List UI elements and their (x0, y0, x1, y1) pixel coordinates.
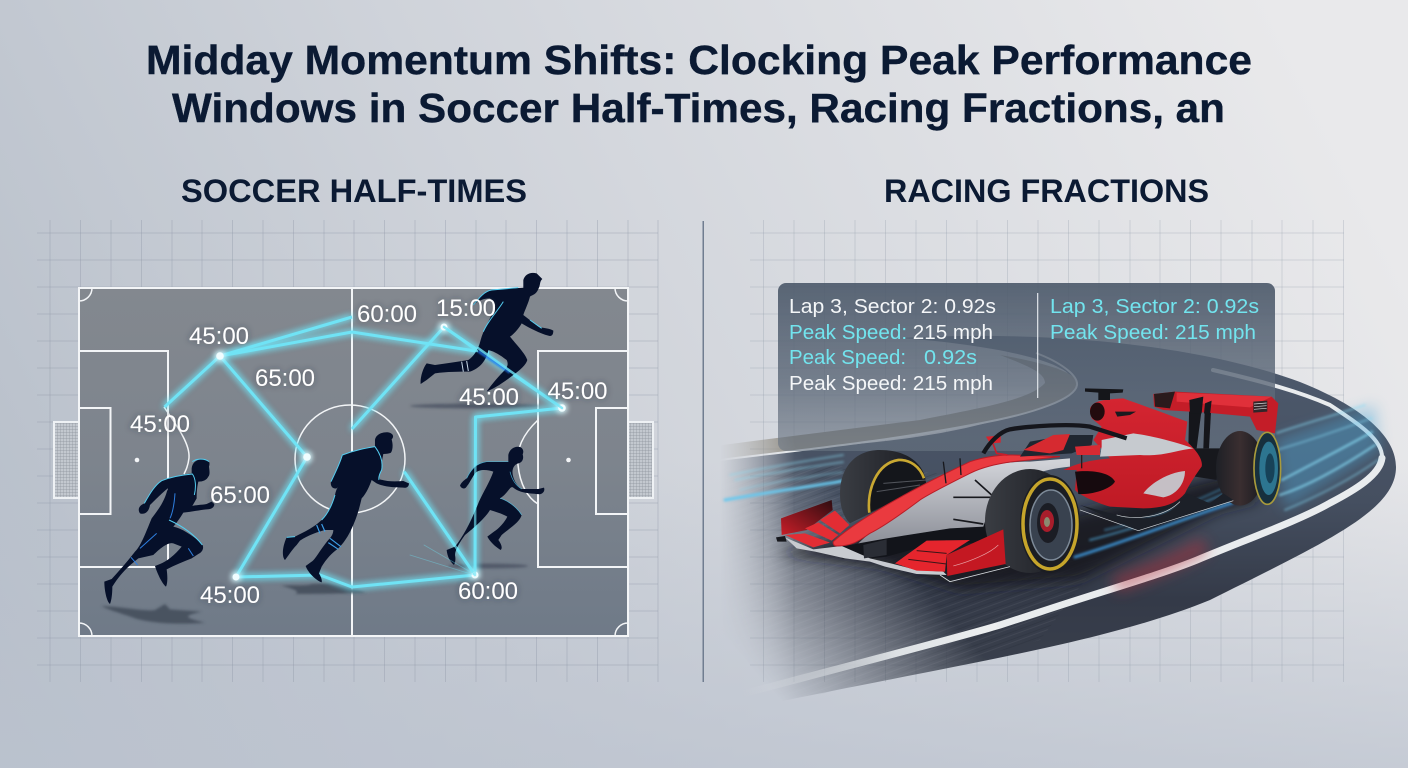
rear section: wing, wheel, floor, engine cover (1063, 388, 1281, 531)
time labels (130, 295, 608, 609)
chassis (842, 507, 1003, 559)
road surface (715, 336, 1396, 712)
time labels: 60:00 (357, 301, 417, 328)
red track glow (1115, 545, 1205, 585)
car shadow (778, 470, 1260, 590)
engine cover (1063, 388, 1202, 508)
cockpit and halo (983, 425, 1127, 468)
panel: racing track (715, 283, 1396, 712)
player: left runner (104, 459, 214, 604)
left readouts: Peak Speed: (789, 347, 906, 369)
right readouts (1050, 296, 1259, 344)
goal nets (54, 422, 653, 498)
left readouts: Peak Speed: 215 mph (789, 322, 993, 344)
race car (776, 388, 1281, 582)
info panel (778, 283, 1275, 451)
tracking lines (164, 317, 562, 587)
player shadows (102, 404, 540, 624)
time labels: 45:00 (547, 378, 608, 405)
title: Midday Momentum Shifts: Clocking Peak Performance (146, 37, 1252, 83)
time labels: 65:00 (210, 482, 270, 509)
time labels: 65:00 (255, 365, 315, 392)
pitch surface and markings (79, 288, 628, 636)
tracking nodes (216, 324, 566, 580)
right readouts: Lap 3, Sector 2: 0.92s (1050, 296, 1259, 318)
left readouts (789, 296, 996, 395)
tracking lines over players (404, 327, 562, 575)
right front wing (895, 529, 1010, 582)
nose red (833, 455, 1060, 546)
player: top runner (421, 273, 553, 392)
heading: soccer half-times: SOCCER HALF-TIMES (181, 173, 527, 209)
time labels: 45:00 (200, 582, 260, 609)
player silhouettes (104, 273, 553, 604)
right readouts: Peak Speed: 215 mph (1050, 322, 1256, 344)
floor (1080, 493, 1233, 531)
white track stripe (735, 370, 1382, 696)
time labels: 45:00 (459, 384, 519, 411)
time labels: 15:00 (436, 295, 496, 322)
left readouts: Peak Speed: 215 mph (789, 373, 993, 395)
panel: soccer pitch (54, 273, 653, 636)
rear wing (1153, 392, 1278, 480)
time labels: 60:00 (458, 578, 518, 605)
left mirror (986, 436, 1001, 443)
far front wheel (840, 450, 927, 523)
player: centre runner (283, 432, 409, 582)
left readouts: 0.92s (924, 347, 977, 369)
near front wheel (985, 469, 1080, 573)
title: Windows in Soccer Half-Times, Racing Fractions, an (172, 85, 1225, 131)
nose details (943, 458, 992, 524)
player: right runner (447, 447, 544, 565)
time labels: 45:00 (130, 411, 190, 438)
front section: far wheel, left wing, nose (776, 436, 1070, 575)
time labels: 45:00 (189, 323, 249, 350)
divider (702, 221, 704, 682)
heading: racing fractions: RACING FRACTIONS (884, 173, 1209, 209)
title (146, 37, 1252, 131)
rear wheel (1216, 431, 1281, 506)
speed streaks (725, 405, 1378, 557)
left readouts: Lap 3, Sector 2: 0.92s (789, 296, 996, 318)
left front wing (776, 500, 947, 575)
nose silver (858, 458, 1070, 543)
blue speed wash (1275, 405, 1380, 510)
panel divider (1037, 293, 1038, 398)
